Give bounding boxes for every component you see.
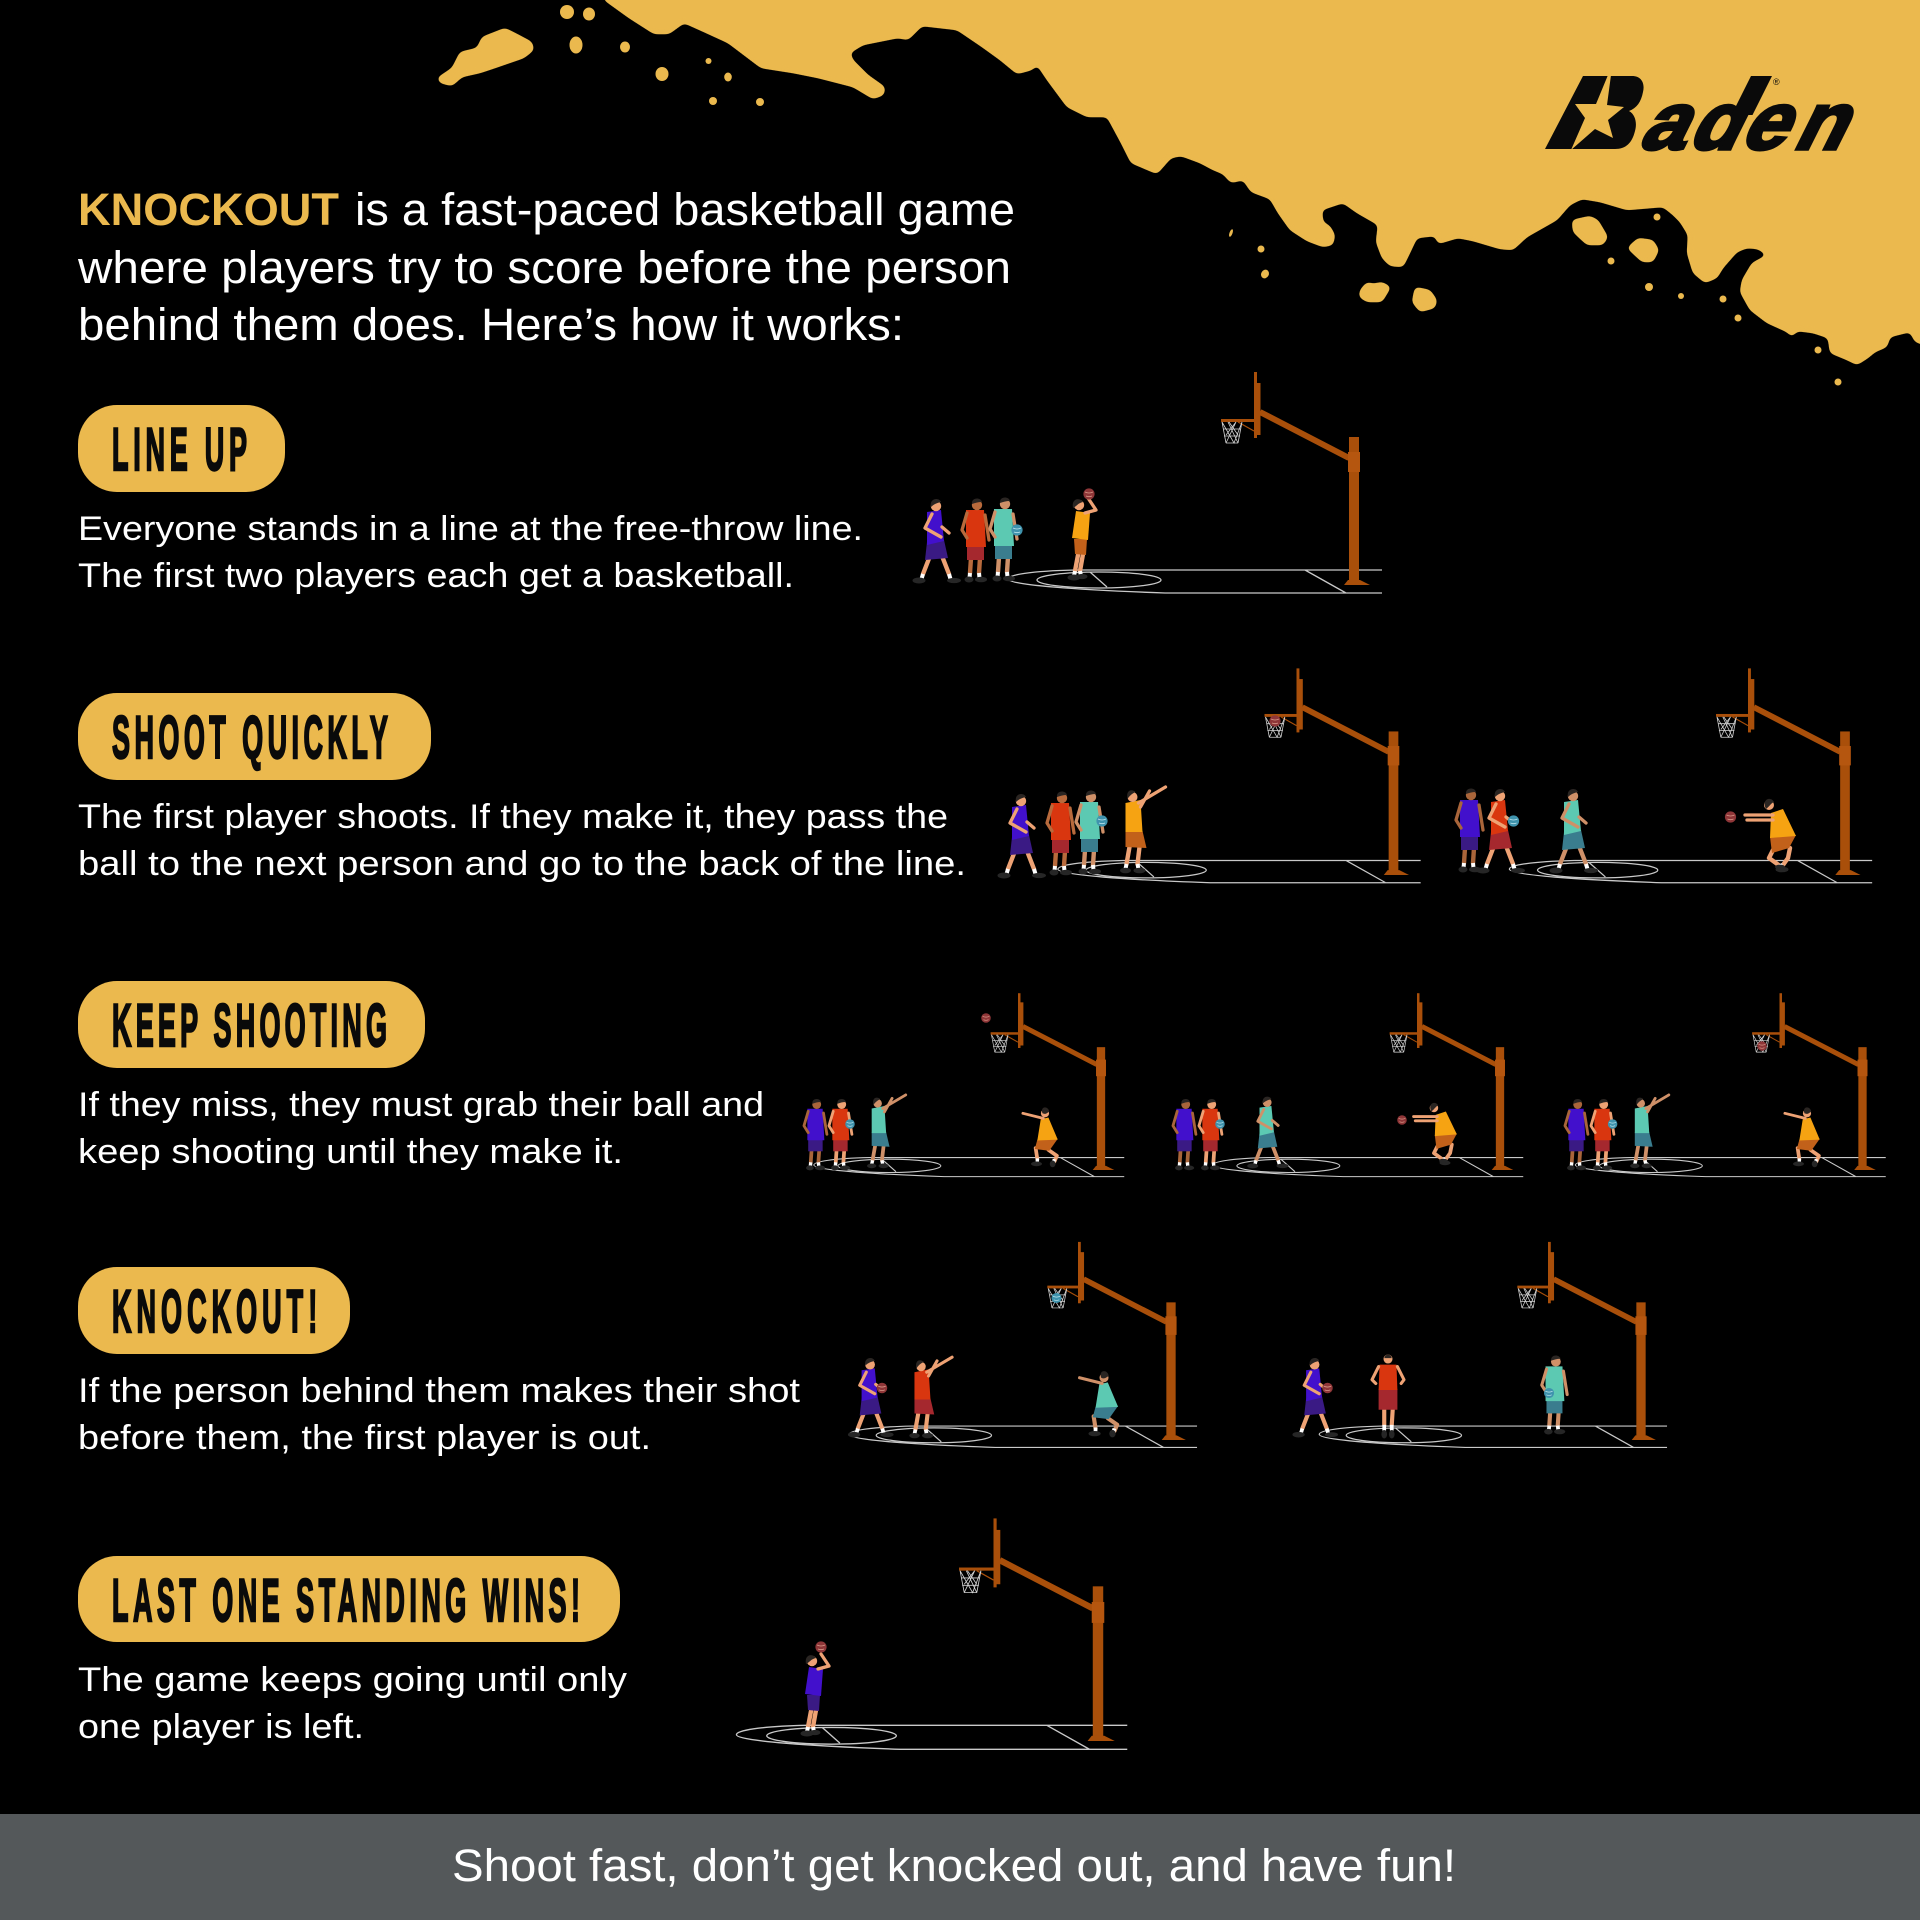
description — [78, 1086, 764, 1171]
pill heading — [78, 981, 425, 1068]
footer bar — [0, 1814, 1920, 1920]
step 4: knockout — [78, 1242, 1667, 1457]
scene: first player shoots and scores — [998, 668, 1421, 883]
pill heading: LINE UP — [112, 416, 247, 483]
scene: first player is out — [1292, 1242, 1667, 1447]
scene: grabs rebound — [1173, 993, 1523, 1177]
description: If the person behind them makes their shot — [78, 1372, 801, 1410]
scene: last player shooting — [736, 1518, 1127, 1749]
scene: shoots again and scores — [1565, 993, 1886, 1177]
step 1: line up — [78, 372, 1382, 595]
step 3: keep shooting — [78, 981, 1886, 1177]
intro text: KNOCKOUT — [78, 184, 339, 235]
intro text: is a fast-paced basketball game — [355, 184, 1015, 235]
scene: four players lined up at the hoop — [912, 372, 1382, 593]
intro text: behind them does. Here’s how it works: — [78, 299, 904, 350]
pill heading — [78, 1267, 350, 1354]
description: If they miss, they must grab their ball and — [78, 1086, 764, 1124]
step 2: shoot quickly — [78, 668, 1872, 883]
pill heading — [78, 1556, 620, 1642]
description: before them, the first player is out. — [78, 1419, 651, 1457]
footer bar: Shoot fast, don’t get knocked out, and have fun! — [452, 1840, 1456, 1891]
pill heading: SHOOT QUICKLY — [112, 704, 388, 771]
pill heading: KEEP SHOOTING — [112, 992, 387, 1059]
description — [78, 798, 966, 883]
description: Everyone stands in a line at the free-throw line. — [78, 510, 863, 548]
description — [78, 1372, 801, 1457]
description — [78, 1661, 627, 1746]
description — [78, 510, 863, 595]
logo: Baden: ® — [1773, 77, 1780, 87]
scene: missed shot — [804, 993, 1124, 1177]
description: The first player shoots. If they make it, they pass the — [78, 798, 948, 836]
pill heading — [78, 693, 431, 780]
scene: second player scores first — [848, 1242, 1197, 1447]
description: keep shooting until they make it. — [78, 1133, 623, 1171]
description: ball to the next person and go to the back of the line. — [78, 845, 966, 883]
scene: first player passes the ball — [1456, 668, 1872, 883]
pill heading: KNOCKOUT! — [112, 1278, 317, 1345]
gold paint splash — [437, 0, 1920, 386]
description: one player is left. — [78, 1708, 364, 1746]
intro text: where players try to score before the person — [77, 242, 1011, 293]
pill heading — [78, 405, 285, 492]
intro text — [77, 184, 1015, 350]
description: The game keeps going until only — [78, 1661, 627, 1699]
description: The first two players each get a basketball. — [78, 557, 794, 595]
step 5: last one standing wins — [78, 1518, 1127, 1749]
logo: Baden: aden — [1628, 76, 1877, 167]
pill heading: LAST ONE STANDING WINS! — [112, 1567, 580, 1634]
